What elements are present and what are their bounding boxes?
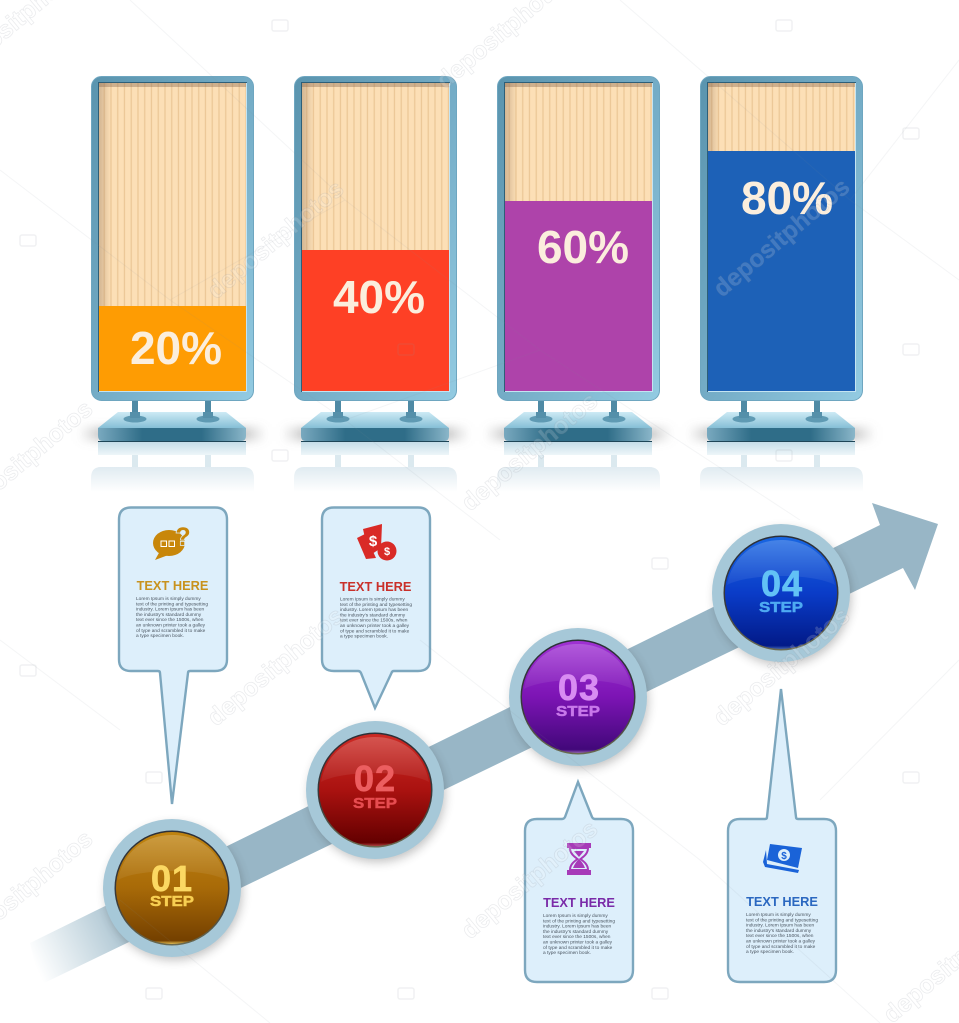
icon: stack of bills xyxy=(763,844,802,873)
heading: TEXT HERE xyxy=(746,894,818,909)
value: 20%: 20% xyxy=(130,322,222,374)
step label: STEP xyxy=(353,795,397,812)
bar: 40% fill xyxy=(302,250,449,391)
arrow: rising progress xyxy=(30,503,938,985)
step label: STEP xyxy=(150,893,194,910)
body text: Lorem Ipsum is simply dummy xyxy=(746,912,811,918)
watermark pattern: depositphotos xyxy=(457,815,603,945)
body text: of type and scrambled it to make xyxy=(746,944,816,950)
callout: step 03 xyxy=(525,782,633,982)
panel: 60% kiosk xyxy=(484,76,673,492)
body text: text of the printing and typesetting xyxy=(543,918,615,924)
icon: speech bubble question xyxy=(153,523,191,560)
step number 03: 03 xyxy=(558,667,600,708)
watermark pattern: depositphotos xyxy=(203,602,349,732)
value: 40%: 40% xyxy=(333,271,425,323)
body text: text ever since the 1500s, when xyxy=(136,617,204,623)
body text: text ever since the 1500s, when xyxy=(340,618,408,624)
body text: an unknown printer took a galley xyxy=(340,623,410,629)
panel: 20% kiosk xyxy=(78,76,267,492)
body text: a type specimen book. xyxy=(746,949,794,955)
bar: 80% fill xyxy=(708,151,855,391)
icon: money and coins: $ xyxy=(369,533,378,550)
body text: an unknown printer took a galley xyxy=(543,940,613,946)
body text: text ever since the 1500s, when xyxy=(746,933,814,939)
step label: STEP xyxy=(759,599,803,616)
bar: 60% fill xyxy=(505,201,652,391)
step number 02: 02 xyxy=(354,758,396,799)
callout: step 01 xyxy=(119,508,227,804)
value: 80%: 80% xyxy=(741,172,833,224)
body text: text of the printing and typesetting xyxy=(340,602,412,608)
panel: 40% kiosk xyxy=(281,76,470,492)
body text: an unknown printer took a galley xyxy=(136,622,206,628)
body text: the industry's standard dummy xyxy=(746,928,812,934)
body text: of type and scrambled it to make xyxy=(136,628,206,634)
step number 01: 01 xyxy=(151,858,193,899)
step 04 badge xyxy=(712,524,851,665)
body text: industry. Lorem Ipsum has been xyxy=(340,607,409,613)
body text: industry. Lorem Ipsum has been xyxy=(136,607,205,613)
body text: the industry's standard dummy xyxy=(340,612,406,618)
body text: Lorem Ipsum is simply dummy xyxy=(543,913,608,919)
body text: industry. Lorem Ipsum has been xyxy=(543,924,612,930)
icon: stack of bills: $ xyxy=(781,851,787,862)
heading: TEXT HERE xyxy=(340,579,412,594)
step 02 badge xyxy=(306,721,445,862)
bar: 20% fill xyxy=(99,306,246,391)
body text: the industry's standard dummy xyxy=(136,612,202,618)
body text: Lorem Ipsum is simply dummy xyxy=(136,596,201,602)
body text: Lorem Ipsum is simply dummy xyxy=(340,596,405,602)
body text: an unknown printer took a galley xyxy=(746,938,816,944)
callout: step 02 xyxy=(322,508,430,708)
step label: STEP xyxy=(556,703,600,720)
body text: the industry's standard dummy xyxy=(543,929,609,935)
heading: TEXT HERE xyxy=(543,895,615,910)
panel: 80% kiosk xyxy=(687,76,876,492)
step 03 badge xyxy=(509,628,648,769)
body text: of type and scrambled it to make xyxy=(340,628,410,634)
body text: text ever since the 1500s, when xyxy=(543,934,611,940)
heading: TEXT HERE xyxy=(137,578,209,593)
callout: step 04 xyxy=(728,689,836,982)
watermark pattern: depositphotos xyxy=(709,602,855,732)
body text: text of the printing and typesetting xyxy=(136,601,208,607)
icon: hourglass xyxy=(567,843,591,875)
body text: text of the printing and typesetting xyxy=(746,917,818,923)
icon: speech bubble question: ? xyxy=(175,523,191,551)
body text: industry. Lorem Ipsum has been xyxy=(746,923,815,929)
step number 04: 04 xyxy=(761,563,803,604)
value: 60%: 60% xyxy=(537,221,629,273)
icon: money and coins xyxy=(357,524,396,560)
watermark pattern: depositphotos xyxy=(457,387,603,517)
step 01 badge xyxy=(103,819,242,960)
body text: a type specimen book. xyxy=(136,633,184,639)
icon: money and coins: $ xyxy=(384,546,390,558)
body text: a type specimen book. xyxy=(340,634,388,640)
watermark pattern: depositphotos xyxy=(709,173,855,303)
watermark pattern: depositphotos xyxy=(203,175,349,305)
body text: a type specimen book. xyxy=(543,950,591,956)
body text: of type and scrambled it to make xyxy=(543,945,613,951)
